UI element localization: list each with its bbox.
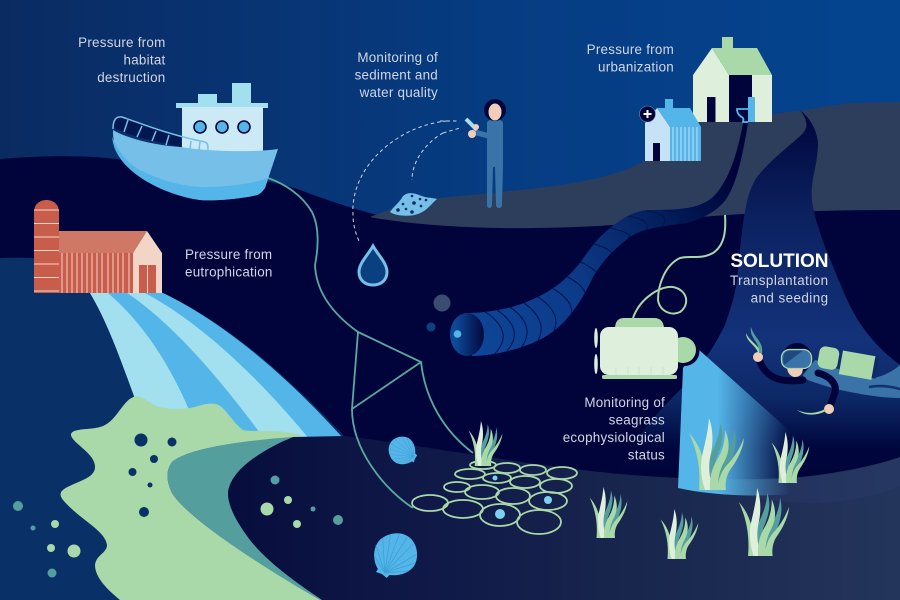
arms bbox=[760, 362, 835, 407]
pipe outlet bbox=[450, 313, 484, 356]
sediment pile bbox=[390, 193, 437, 216]
seagrass tuft 3 bbox=[739, 488, 789, 556]
hair bbox=[484, 99, 506, 121]
scallop shell small bbox=[388, 436, 418, 465]
propellers bbox=[594, 328, 598, 374]
light cone from submersible bbox=[678, 348, 810, 495]
label: transplantation and seeding: and seeding bbox=[751, 290, 828, 306]
label: seagrass monitoring: ecophysiological bbox=[563, 430, 665, 445]
submersible bbox=[594, 318, 700, 379]
label: seagrass monitoring: status bbox=[628, 448, 665, 462]
label: urbanization: Pressure from bbox=[587, 42, 674, 57]
silo bbox=[34, 200, 59, 293]
seaweed blob and sand bank bbox=[61, 396, 330, 600]
sewage pipe bbox=[450, 123, 748, 358]
chimney bbox=[722, 37, 733, 49]
toilet bbox=[737, 97, 755, 122]
portholes bbox=[194, 121, 250, 133]
seagrass tuft 5 bbox=[661, 509, 698, 559]
bow railing bbox=[113, 117, 208, 150]
outlet dot bbox=[454, 330, 461, 338]
label: eutrophication: eutrophication bbox=[185, 264, 273, 280]
wetsuit body and fins bbox=[803, 360, 900, 398]
dark deep water bbox=[0, 156, 900, 600]
label: eutrophication: Pressure from bbox=[185, 247, 272, 262]
label: transplantation and seeding: Transplantation bbox=[730, 273, 828, 288]
seagrass tuft 4 bbox=[590, 487, 627, 538]
small blue house bbox=[640, 99, 701, 161]
diver planting seagrass bbox=[746, 327, 900, 415]
seagrass tuft on net bbox=[469, 421, 502, 466]
label: habitat destruction: destruction bbox=[97, 70, 166, 85]
face bbox=[488, 104, 502, 120]
seagrass tuft 1 bbox=[689, 418, 744, 490]
hull bbox=[113, 130, 278, 200]
seagrass in hands bbox=[746, 327, 826, 415]
hands bbox=[468, 124, 479, 138]
coastal hill bbox=[370, 102, 900, 228]
hood bbox=[782, 343, 812, 373]
large green house bbox=[693, 37, 772, 122]
coastal seaweed blob bbox=[61, 396, 322, 600]
label: urbanization: urbanization bbox=[598, 60, 674, 74]
skid bbox=[602, 375, 677, 379]
teal sand bank bbox=[167, 437, 330, 600]
hull stripe bbox=[112, 137, 268, 200]
label: sediment and water monitoring: water quality bbox=[359, 85, 438, 100]
label: sediment and water monitoring: sediment and bbox=[355, 68, 438, 82]
label: seagrass monitoring: Monitoring of bbox=[584, 395, 665, 410]
seagrass tuft 2 bbox=[772, 432, 809, 483]
barn door bbox=[139, 265, 156, 293]
runoff stream bbox=[90, 293, 342, 440]
wall bbox=[693, 48, 772, 122]
sensor cable bbox=[633, 215, 725, 318]
water drop icon bbox=[359, 246, 387, 285]
left shallow water bbox=[0, 258, 345, 600]
tank bbox=[816, 345, 880, 381]
doorway bbox=[729, 75, 752, 122]
dots on left water bbox=[13, 501, 80, 578]
seabed bbox=[228, 436, 900, 600]
hands bbox=[753, 352, 834, 414]
barn roof bbox=[59, 231, 147, 253]
solution light beam bbox=[620, 110, 900, 470]
plus badge bbox=[640, 106, 656, 122]
farm with silo and barn bbox=[34, 200, 162, 293]
researcher with sampler bbox=[466, 99, 506, 208]
face bbox=[787, 367, 803, 377]
body bbox=[487, 119, 503, 208]
chimneys and roof bbox=[176, 83, 268, 108]
sampling dashes bbox=[353, 121, 460, 243]
barn wall bbox=[59, 253, 133, 293]
dots on blob bbox=[128, 434, 176, 517]
label: solution heading: SOLUTION bbox=[730, 251, 828, 272]
dots on seabed bbox=[260, 476, 343, 528]
bubbles bbox=[426, 294, 450, 332]
sampler tube bbox=[466, 119, 477, 130]
top hatch bbox=[615, 318, 664, 327]
viewport bbox=[670, 337, 696, 363]
hull bbox=[600, 327, 678, 375]
label: sediment and water monitoring: Monitoring of bbox=[357, 50, 438, 65]
lit seabed patch bbox=[720, 457, 900, 503]
label: habitat destruction: Pressure from bbox=[78, 35, 166, 50]
scallop shell large bbox=[374, 533, 417, 578]
roof bbox=[712, 48, 772, 75]
trawl cable and net frame bbox=[268, 178, 473, 508]
barn gable bbox=[133, 231, 162, 293]
cabin bbox=[182, 107, 263, 153]
label: seagrass monitoring: seagrass bbox=[609, 412, 665, 428]
lamp housing bbox=[670, 336, 700, 366]
label: habitat destruction: habitat bbox=[124, 52, 166, 68]
net of seagrass patches bbox=[412, 461, 577, 534]
fishing boat bbox=[112, 83, 278, 200]
mask bbox=[782, 350, 812, 368]
